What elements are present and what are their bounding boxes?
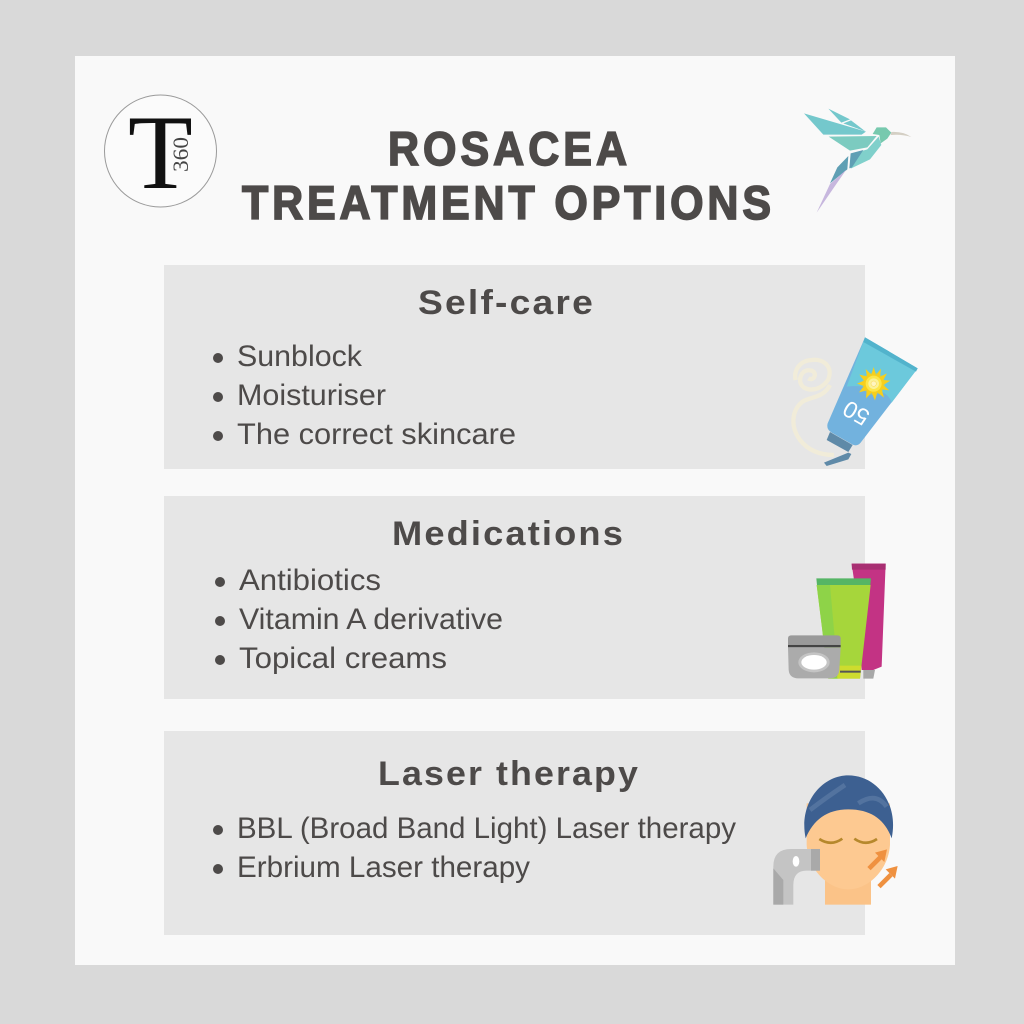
title: TREATMENT OPTIONS — [242, 176, 771, 229]
main white panel — [75, 56, 955, 965]
list: laser therapy: Erbrium Laser therapy — [237, 851, 530, 884]
logo: T360: T — [128, 94, 193, 211]
icon: woman receiving laser treatment — [773, 775, 898, 905]
icon: cream tubes and jar — [788, 564, 886, 679]
list: self-care: Moisturiser — [237, 379, 386, 412]
logo: T360 — [104, 94, 216, 211]
list: self-care: The correct skincare — [237, 418, 516, 451]
logo: T360: 360 — [168, 137, 193, 172]
panel: laser therapy — [164, 731, 898, 935]
list: medications — [215, 564, 503, 675]
list: laser therapy — [213, 812, 736, 884]
list: laser therapy: BBL (Broad Band Light) Laser therapy — [237, 812, 736, 845]
list: medications: Vitamin A derivative — [239, 603, 503, 636]
icon: sunscreen tube: 50 — [838, 395, 874, 431]
list: medications: Topical creams — [239, 642, 447, 675]
list: self-care — [213, 340, 516, 451]
heading: self-care: Self-care — [418, 284, 595, 322]
heading: laser therapy: Laser therapy — [378, 755, 640, 793]
icon: sunscreen tube — [793, 337, 918, 466]
panel: self-care — [164, 265, 918, 469]
title — [242, 122, 771, 229]
icon: hummingbird — [804, 109, 911, 213]
list: self-care: Sunblock — [237, 340, 363, 373]
panel: medications — [164, 496, 886, 699]
title: ROSACEA — [388, 122, 627, 175]
heading: medications: Medications — [392, 515, 625, 553]
list: medications: Antibiotics — [239, 564, 381, 597]
